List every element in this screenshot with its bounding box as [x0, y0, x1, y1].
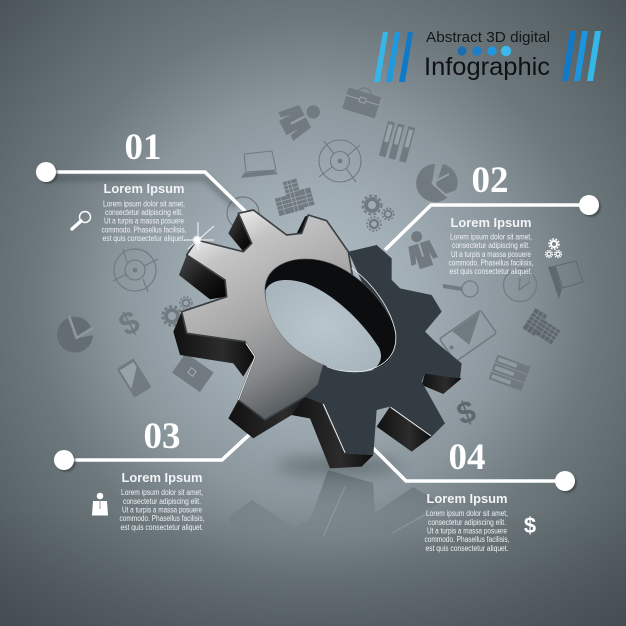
gear side walls: [173, 213, 462, 468]
body 02: [448, 232, 534, 276]
number 03: 03: [144, 416, 180, 457]
icon: binders: [379, 121, 415, 163]
body 03: Lorem ipsum dolor sit amet,: [121, 488, 203, 497]
body 04: Ut a turpis a massa posuere: [427, 526, 507, 536]
block 03: [92, 416, 204, 532]
icon: laptop: [241, 151, 278, 178]
gear face dark half: [305, 245, 462, 455]
body 01: Ut a turpis a massa posuere: [104, 217, 184, 226]
body 04: commodo. Phasellus facilisis,: [424, 535, 510, 544]
icon: target left: [113, 249, 158, 292]
body 02: est quis consectetur aliquet.: [450, 267, 532, 276]
icon: clock: [504, 268, 536, 302]
icon: dollar right: $: [452, 393, 480, 432]
body 03: est quis consectetur aliquet.: [120, 523, 204, 532]
gear face light half: [182, 210, 357, 420]
body 01: commodo. Phasellus facilisis,: [102, 225, 186, 234]
body 01: [102, 200, 186, 243]
icon: briefcase lower: [172, 353, 214, 392]
subtitle: Abstract 3D digital: [426, 30, 550, 46]
body 02: Lorem ipsum dolor sit amet,: [450, 232, 532, 242]
body 01: est quis consectetur aliquet.: [102, 234, 186, 243]
block 01: [72, 127, 186, 243]
block 02: [448, 160, 562, 276]
icon: magnifier: [72, 212, 90, 229]
heading 02: Lorem Ipsum: [450, 215, 532, 230]
title: Infographic: [424, 53, 550, 81]
icon: person: [92, 493, 108, 516]
body 02: consectetur adipiscing elit.: [452, 241, 530, 250]
icon: magnifier right: [443, 281, 478, 297]
body 01: Lorem ipsum dolor sit amet,: [103, 200, 185, 208]
dots: [457, 46, 511, 56]
gear hole rim highlight: [327, 268, 396, 372]
icon: pie chart left: [57, 316, 93, 353]
left stripes: [374, 32, 413, 82]
heading 04: Lorem Ipsum: [426, 491, 508, 506]
connector line 4: [373, 448, 577, 493]
gear highlight edges: [238, 343, 431, 453]
gear reflection on floor: [228, 457, 440, 545]
heading 03: Lorem Ipsum: [122, 470, 202, 485]
icon: binders right: [489, 355, 530, 391]
icon: building right: [523, 308, 563, 346]
header: [374, 30, 601, 82]
body 03: Ut a turpis a massa posuere: [122, 506, 202, 514]
icon: phone left: [117, 358, 151, 398]
gear hole wall: [265, 259, 396, 372]
icon: dollar: $: [524, 513, 536, 538]
connector line 3: [54, 434, 250, 472]
number 02: 02: [472, 160, 508, 201]
body 03: [120, 488, 204, 532]
icon: gears: [362, 196, 394, 231]
icon: target: [319, 140, 361, 182]
icon: building: [271, 176, 315, 216]
body 04: est quis consectetur aliquet.: [426, 544, 508, 553]
icon: partial magnifier: [227, 197, 259, 229]
icon: gears: [546, 239, 562, 258]
right stripes: [562, 31, 601, 81]
number 01: 01: [124, 127, 162, 168]
3D gear: [173, 210, 462, 468]
icon: person right: [402, 227, 440, 271]
icon: briefcase: [342, 83, 382, 118]
background icon pattern: [57, 83, 583, 432]
body 02: Ut a turpis a massa posuere: [451, 250, 531, 259]
sparkle: [184, 222, 214, 250]
body 04: Lorem ipsum dolor sit amet,: [426, 509, 508, 518]
body 04: consectetur adipiscing elit.: [428, 518, 506, 527]
body 03: commodo. Phasellus facilisis,: [120, 514, 204, 523]
icon: dollar left: $: [113, 303, 145, 343]
icon: gears left: [162, 297, 192, 326]
body 01: consectetur adipiscing elit.: [105, 208, 183, 217]
block 04: [424, 437, 536, 553]
body 04: [424, 509, 510, 553]
connector line 2: [385, 195, 601, 250]
heading 01: Lorem Ipsum: [104, 181, 184, 196]
body 03: consectetur adipiscing elit.: [123, 497, 201, 506]
icon: laptop right: [548, 261, 583, 299]
gear hole opening: [266, 280, 381, 372]
icon: person: [275, 95, 327, 142]
number 04: 04: [448, 437, 486, 478]
body 02: commodo. Phasellus facilisis,: [448, 258, 534, 268]
icon: pie chart: [416, 164, 458, 202]
icon: tablet: [439, 310, 497, 362]
connector line 1: [36, 162, 246, 212]
